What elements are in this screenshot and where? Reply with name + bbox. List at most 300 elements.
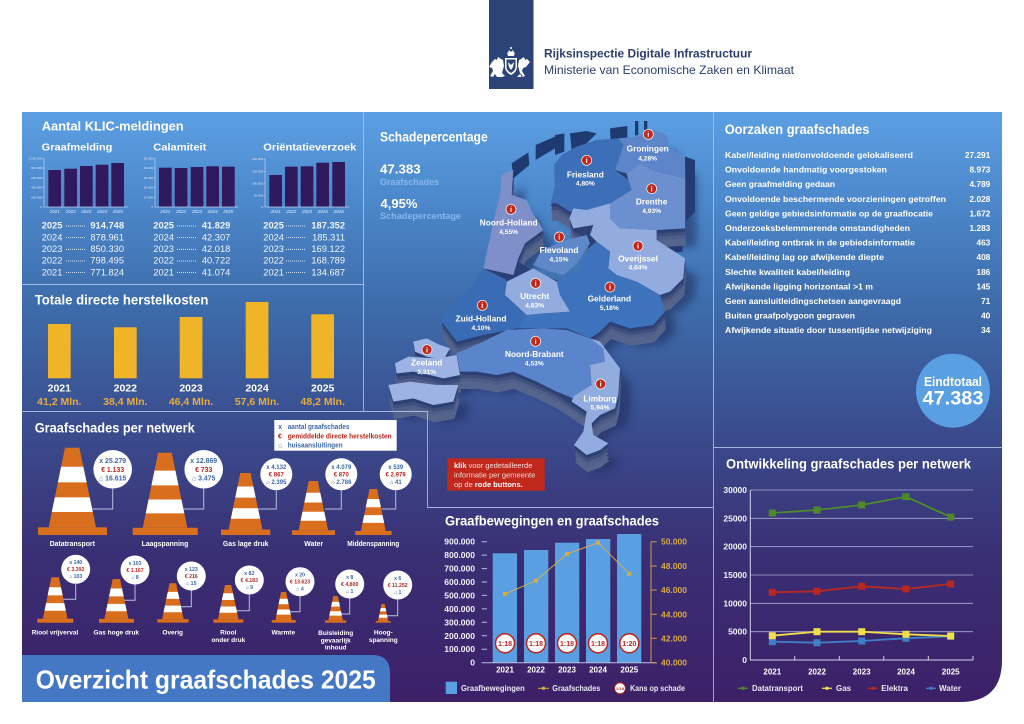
combo chart: 2021 [496, 666, 514, 675]
header organisation name: Ministerie van Economische Zaken en Klimaat [544, 63, 795, 77]
header organisation name [544, 46, 795, 77]
province labels: 3,31% [417, 369, 436, 376]
cone: Gas lage druk: x 4.132 [266, 465, 287, 471]
column: Calamiteit: 20.000 [144, 186, 153, 190]
header logo block [489, 0, 534, 89]
column: Graafmelding: 2024 [42, 232, 62, 242]
cone: Datatransport: Datatransport [50, 541, 96, 548]
column: Graafmelding: 2022 [65, 209, 76, 214]
province labels: Groningen [627, 143, 669, 153]
list of causes [725, 150, 991, 335]
cone: Riool onder druk: x 82 [244, 571, 254, 577]
province labels: Noord-Holland [480, 218, 538, 228]
combo chart: 1:18 [591, 641, 605, 648]
province labels [411, 143, 669, 412]
column: Graafmelding: 1.000.000 [29, 156, 42, 160]
bar chart: herstelkosten: 38,4 Mln. [103, 396, 148, 408]
bar chart: herstelkosten: 2021 [48, 383, 71, 395]
combo chart: 2024 [589, 666, 607, 675]
map of the Netherlands: i [426, 345, 428, 354]
province: Noord-Holland [483, 170, 543, 275]
cone: Water: € 870 [334, 472, 349, 478]
cone: Hoogspanning: Hoog- [374, 630, 393, 636]
list of causes: Geen geldige gebiedsinformatie op de graaflocatie [725, 208, 933, 218]
cone: Warmte [271, 567, 314, 636]
list of causes: 34 [981, 325, 991, 335]
list of causes: Kabel/leiding ontbrak in de gebiedsinformatie [725, 238, 915, 248]
line chart: 2023 [853, 668, 871, 676]
column: Graafmelding [29, 142, 128, 277]
province labels: 4,93% [642, 208, 661, 215]
map of the Netherlands: i [651, 184, 653, 193]
legend: cone values: gemiddelde directe herstelkosten [288, 434, 392, 440]
province: Utrecht [505, 268, 570, 315]
column: Calamiteit: 0 [151, 205, 153, 209]
province labels: Noord-Brabant [505, 349, 564, 359]
combo chart: 2022 [527, 666, 545, 675]
map of the Netherlands: i [586, 156, 588, 165]
column: Oriëntatieverzoek: 2024 [317, 209, 328, 214]
cone: Gas hoge druk: x 103 [129, 561, 142, 567]
legend: cone values: x [278, 424, 282, 431]
cone: Overig [157, 562, 206, 636]
province labels: Utrecht [520, 291, 549, 301]
column: Graafmelding: 2024 [96, 209, 108, 214]
cone: Gas hoge druk: € 1.167 [126, 568, 144, 574]
panel: Oorzaken graafschades [725, 121, 991, 428]
list of causes: Onvoldoende beschermende voorzieningen getroffen [725, 194, 946, 204]
column: Calamiteit: 2025 [222, 209, 234, 214]
list of causes: 4.789 [970, 179, 991, 189]
map of the Netherlands: i [510, 205, 512, 214]
province: Flevoland [533, 235, 590, 275]
heading: oorzaken: Oorzaken graafschades [725, 121, 870, 137]
column: Oriëntatieverzoek: 50.000 [254, 194, 263, 198]
province labels: 5,18% [600, 305, 619, 312]
column: Oriëntatieverzoek: 2024 [263, 232, 284, 242]
province: Friesland [551, 138, 632, 212]
list of causes: 1.283 [970, 223, 991, 233]
legend: networks: Gas [836, 684, 852, 693]
cone: Water: Water [304, 541, 323, 548]
column: Graafmelding: 2021 [49, 209, 60, 214]
cone: Buisleiding gevaarlijk inhoud: € 4.800 [341, 582, 358, 588]
list of causes: Buiten graafpolygoon gegraven [725, 311, 855, 321]
cone: Hoogspanning [369, 570, 412, 644]
cone: Riool onder druk: Riool [220, 630, 237, 636]
bar chart: herstelkosten: 2022 [114, 383, 137, 395]
total badge: 47.383 [922, 389, 984, 410]
cone: Overig: x 123 [185, 567, 198, 573]
callout: klik op rode buttons: op de rode buttons. [454, 480, 523, 489]
column: Graafmelding: 2023 [80, 209, 92, 214]
series: Elektra [769, 580, 954, 596]
cone: Middenspanning: € 2.979 [386, 472, 406, 478]
header organisation name: Rijksinspectie Digitale Infrastructuur [544, 46, 752, 60]
column: Oriëntatieverzoek: 2021 [270, 209, 281, 214]
list of causes: 408 [976, 252, 991, 262]
map of the Netherlands: i [535, 279, 537, 288]
province labels: 4,15% [550, 257, 569, 264]
legend: cone values: huisaansluitingen [288, 442, 343, 449]
panel: Graafschades per netwerk [32, 420, 412, 652]
column: Calamiteit: 2021 [159, 209, 171, 214]
cone: Overig: Overig [162, 630, 183, 636]
line chart: 2025 [942, 668, 960, 676]
column: Oriëntatieverzoek: 200.000 [252, 157, 263, 161]
stat: schadepercentage: Schadepercentage [380, 211, 461, 221]
stat: schadepercentage: 4,95% [380, 197, 418, 211]
province: Zeeland [388, 338, 460, 405]
column: Graafmelding: 2021 [42, 267, 62, 277]
cone: Warmte: x 20 [295, 572, 305, 578]
column: Graafmelding: 878.961 [90, 232, 124, 242]
province labels: 4,80% [576, 181, 595, 188]
cone: Overig: € 216 [185, 574, 198, 580]
province labels: 4,53% [525, 360, 544, 367]
combo chart: 900.000 [444, 537, 475, 547]
list of causes: 71 [981, 296, 991, 306]
cone: Gas lage druk: € 867 [269, 472, 284, 478]
line chart: 2022 [808, 668, 826, 676]
combo chart: 800.000 [444, 550, 475, 560]
line chart: 2021 [763, 668, 782, 676]
cone: Middenspanning [347, 458, 412, 548]
column: Calamiteit: 41.829 [202, 221, 230, 231]
legend: networks: Datatransport [752, 684, 803, 693]
bar chart: herstelkosten [37, 302, 345, 408]
icon: coat of arms [489, 47, 530, 77]
panel: Schadepercentage map [380, 121, 697, 491]
legend: cone values: € [278, 434, 282, 440]
heading: Schadepercentage: Schadepercentage [380, 130, 488, 145]
column: Calamiteit: 42.307 [202, 232, 230, 242]
cone: Hoogspanning: x 6 [394, 576, 401, 582]
legend: cone values: ⌂ [278, 442, 282, 449]
column: Oriëntatieverzoek [252, 142, 356, 277]
line chart: 2024 [897, 668, 915, 676]
map of the Netherlands: i [647, 130, 649, 139]
province labels: Drenthe [636, 197, 668, 207]
cone: Buisleiding gevaarlijk inhoud: Buisleiding [318, 630, 353, 637]
bar chart: herstelkosten: 57,6 Mln. [235, 396, 279, 408]
cone: Buisleiding gevaarlijk inhoud: inhoud [325, 645, 347, 652]
combo chart: 700.000 [444, 564, 475, 574]
cone: Datatransport: ⌂ 16.615 [99, 476, 126, 482]
cone: Buisleiding gevaarlijk inhoud: gevaarlijk [321, 637, 351, 644]
legend: graafbewegingen: Graafbewegingen [461, 684, 525, 693]
column: Calamiteit [144, 142, 238, 277]
legend: graafbewegingen [446, 682, 685, 694]
combo chart: 1:18 [560, 641, 574, 648]
list of causes: 463 [976, 238, 991, 248]
combo chart: 1:18 [498, 641, 512, 648]
line chart: 0 [742, 655, 747, 665]
map of the Netherlands: i [481, 301, 483, 310]
combo chart: 0 [470, 658, 475, 668]
combo chart: 44.000 [661, 609, 687, 619]
list of causes: Kabel/leiding niet/onvoldoende gelokaliseerd [725, 150, 913, 160]
province labels: Flevoland [540, 245, 578, 255]
cone: Buisleiding gevaarlijk inhoud: ⌂ 1 [346, 589, 354, 595]
cone: Laagspanning [133, 450, 223, 548]
list of causes: Onderzoeksbelemmerende omstandigheden [725, 223, 910, 233]
combo chart: 40.000 [661, 658, 687, 668]
column: Oriëntatieverzoek: 150.000 [252, 170, 263, 174]
column: Graafmelding: 850.330 [90, 244, 124, 254]
combo chart: 42.000 [661, 633, 687, 643]
combo chart: 50.000 [661, 537, 687, 547]
cone: Warmte: € 13.623 [290, 580, 310, 586]
bar chart: herstelkosten: 2024 [245, 383, 269, 395]
map of the Netherlands: i [600, 380, 602, 389]
legend: networks: Water [939, 684, 961, 693]
column: Oriëntatieverzoek: 2021 [263, 267, 284, 277]
combo chart: 46.000 [661, 585, 687, 595]
column: Calamiteit: 42.018 [202, 244, 230, 254]
combo chart: 500.000 [444, 590, 475, 600]
series: Gas [769, 628, 954, 640]
column: Graafmelding: 2025 [112, 209, 123, 214]
column: Oriëntatieverzoek: 2023 [263, 244, 284, 254]
column: Calamiteit: 50.000 [144, 156, 153, 160]
cone: Riool vrijverval: Riool vrijverval [32, 630, 78, 636]
column: Calamiteit: 2023 [191, 209, 203, 214]
cone: Overig: ⌂ 15 [186, 581, 197, 587]
legend: graafbewegingen: Graafschades [552, 684, 601, 693]
combo chart: 300.000 [444, 617, 475, 627]
panel: Graafbewegingen en graafschades [444, 513, 687, 694]
column: Graafmelding: 400.000 [31, 186, 42, 190]
province labels: 4,55% [499, 229, 518, 236]
cone: Riool onder druk: onder druk [211, 637, 246, 644]
province labels: Gelderland [588, 294, 631, 304]
cone: Riool vrijverval [32, 555, 90, 636]
cone: Hoogspanning: € 11.252 [388, 583, 408, 589]
combo chart: 1:20 [622, 641, 636, 648]
combo chart: 48.000 [661, 561, 687, 571]
column: Oriëntatieverzoek: 2022 [285, 209, 297, 214]
column: Oriëntatieverzoek: 169.122 [311, 244, 345, 254]
list of causes: 1.672 [970, 208, 991, 218]
column: Graafmelding: 800.000 [31, 166, 42, 170]
column: Oriëntatieverzoek: 2025 [333, 209, 344, 214]
list of causes: 2.028 [970, 194, 991, 204]
cone: Datatransport: € 1.133 [101, 467, 124, 474]
province labels: 4,10% [472, 325, 491, 332]
column: Oriëntatieverzoek: 185.311 [312, 232, 345, 242]
line chart: 20000 [723, 542, 747, 552]
cone: Datatransport: x 25.279 [99, 458, 126, 465]
list of causes: Slechte kwaliteit kabel/leiding [725, 267, 850, 277]
legend: networks: Elektra [881, 684, 909, 693]
column: Oriëntatieverzoek: 2023 [301, 209, 313, 214]
cone: Laagspanning: x 12.869 [190, 458, 217, 465]
list of causes: Geen graafmelding gedaan [725, 179, 835, 189]
cone: Riool vrijverval: x 140 [69, 560, 82, 566]
series: Water [769, 633, 954, 646]
bar chart: herstelkosten: 41,2 Mln. [37, 396, 82, 408]
province labels: Limburg [583, 393, 617, 403]
list of causes: 8.973 [970, 165, 991, 175]
column: Calamiteit: 2024 [153, 232, 174, 242]
total badge: Eindtotaal [924, 375, 982, 389]
title banner: Overzicht graafschades 2025 [36, 664, 376, 694]
info buttons [422, 129, 657, 389]
combo chart: 100.000 [444, 644, 475, 654]
cone: Laagspanning: Laagspanning [142, 541, 188, 548]
legend: cone values [274, 420, 397, 451]
line chart: 30000 [723, 485, 747, 495]
combo chart: 600.000 [444, 577, 475, 587]
cone: Hoogspanning: ⌂ 1 [394, 590, 402, 596]
stat: schadepercentage [380, 197, 461, 221]
cone: Gas hoge druk: ⌂ 8 [131, 575, 139, 581]
callout: klik op rode buttons: klik voor gedetailleerde [454, 461, 532, 470]
map of the Netherlands: i [609, 283, 611, 292]
legend: graafbewegingen: Kans op schade [630, 684, 685, 693]
list of causes: 27.291 [965, 150, 991, 160]
line chart: 10000 [723, 598, 747, 608]
combo chart [444, 534, 687, 675]
cone: Water: x 4.079 [331, 465, 352, 471]
cone: Buisleiding gevaarlijk inhoud [318, 570, 364, 652]
list of causes: 40 [981, 311, 991, 321]
combo chart: 400.000 [444, 604, 475, 614]
column: Calamiteit: 41.074 [202, 267, 230, 277]
cone: Middenspanning: ⌂ 41 [390, 480, 402, 486]
map of the Netherlands [388, 121, 697, 473]
cone: Middenspanning: Middenspanning [347, 541, 399, 548]
heading: per netwerk: Graafschades per netwerk [35, 420, 195, 436]
bar chart: herstelkosten: 48,2 Mln. [301, 396, 345, 408]
column: Calamiteit: 40.722 [202, 256, 230, 266]
column: Oriëntatieverzoek: 0 [261, 205, 263, 209]
stat: graafschades [380, 162, 439, 187]
column: Oriëntatieverzoek: 134.687 [311, 267, 345, 277]
map of the Netherlands: i [637, 242, 639, 251]
combo chart: 2023 [558, 666, 576, 675]
column: Oriëntatieverzoek: 187.352 [311, 221, 345, 231]
column: Calamiteit: Calamiteit [153, 142, 207, 154]
bar chart: herstelkosten: 2023 [179, 383, 203, 395]
province labels: Zuid-Holland [456, 314, 506, 324]
column: Graafmelding: 2023 [42, 244, 62, 254]
cone: Warmte: Warmte [271, 630, 295, 636]
bar chart: herstelkosten: 46,4 Mln. [169, 396, 213, 408]
line chart: 5000 [728, 627, 747, 637]
cone: Riool vrijverval: ⌂ 103 [69, 574, 82, 580]
province: Limburg [572, 338, 620, 455]
legend: graafbewegingen: 1:18 [616, 686, 625, 691]
map of the Netherlands: i [535, 337, 537, 346]
column: Graafmelding: Graafmelding [42, 142, 112, 154]
panel: Aantal KLIC-meldingen [29, 119, 356, 277]
column: Calamiteit: 2022 [175, 209, 187, 214]
combo chart: 1:18 [529, 641, 543, 648]
column: Oriëntatieverzoek: 168.789 [311, 256, 345, 266]
cone: Gas lage druk: Gas lage druk [223, 541, 269, 548]
column: Calamiteit: 2022 [153, 256, 174, 266]
column: Calamiteit: 2021 [153, 267, 174, 277]
list of causes: Kabel/leiding lag op afwijkende diepte [725, 252, 884, 262]
province labels: 4,64% [629, 264, 648, 271]
province: Groningen [615, 130, 685, 178]
cone: Riool onder druk: ⌂ 9 [246, 585, 253, 591]
column: Graafmelding: 200.000 [31, 196, 42, 200]
column: Graafmelding: 914.748 [90, 221, 124, 231]
cone: Gas lage druk: ⌂ 2.395 [266, 480, 287, 486]
heading: graafbewegingen: Graafbewegingen en graafschades [445, 513, 659, 529]
stat: graafschades: Graafschades [380, 177, 439, 187]
callout: klik op rode buttons [447, 458, 545, 491]
column: Calamiteit: 2023 [153, 244, 174, 254]
column: Oriëntatieverzoek: 2022 [263, 256, 284, 266]
panel: Ontwikkeling graafschades per netwerk [723, 455, 973, 693]
column: Calamiteit: 40.000 [144, 166, 153, 170]
line chart: 25000 [723, 513, 747, 523]
column: Graafmelding: 600.000 [31, 176, 42, 180]
total badge [916, 354, 990, 428]
list of causes: Geen aansluitleidingschetsen aangevraagd [725, 296, 901, 306]
panel: Totale directe herstelkosten [35, 292, 345, 408]
list of causes: Afwijkende situatie door tussentijdse netwijziging [725, 325, 932, 335]
combo chart: 200.000 [444, 631, 475, 641]
column: Oriëntatieverzoek: 2025 [263, 221, 284, 231]
cone: Riool vrijverval: € 3.393 [67, 567, 84, 573]
column: Graafmelding: 2025 [42, 221, 62, 231]
province labels: Zeeland [411, 358, 442, 368]
province: Drenthe [610, 163, 685, 230]
cone: Datatransport [38, 448, 132, 548]
province: Noord-Brabant [457, 328, 605, 398]
cone: Riool onder druk: € 4.183 [241, 578, 258, 584]
combo chart: 2025 [620, 666, 639, 675]
column: Graafmelding: 0 [40, 205, 42, 209]
province labels: 4,28% [638, 155, 657, 162]
line chart [723, 485, 973, 676]
cone: Riool onder druk [211, 566, 264, 644]
cone: Hoogspanning: spanning [369, 637, 398, 644]
province labels: 5,94% [591, 405, 610, 412]
cone: Buisleiding gevaarlijk inhoud: x 8 [346, 575, 353, 581]
list of causes: Onvoldoende handmatig voorgestoken [725, 165, 887, 175]
list of causes: 145 [976, 281, 991, 291]
province labels: 4,83% [525, 302, 544, 309]
map of the Netherlands: i [558, 233, 560, 242]
list of causes: Afwijkende ligging horizontaal >1 m [725, 281, 873, 291]
column: Calamiteit: 2025 [153, 221, 174, 231]
legend: networks [738, 684, 961, 693]
province labels: Overijssel [618, 253, 658, 263]
heading: herstelkosten: Totale directe herstelkosten [35, 292, 208, 307]
title banner [22, 655, 390, 702]
cone: Gas hoge druk: Gas hoge druk [94, 630, 139, 636]
cone: Laagspanning: ⌂ 3.475 [192, 476, 216, 482]
cone: Water [292, 458, 357, 548]
column: Calamiteit: 30.000 [144, 176, 153, 180]
column: Graafmelding: 771.824 [90, 267, 124, 277]
cone: Gas hoge druk [94, 556, 150, 636]
province labels: Friesland [567, 169, 604, 179]
province: Zuid-Holland [442, 268, 527, 342]
column: Calamiteit: 10.000 [144, 196, 153, 200]
heading: ontwikkeling: Ontwikkeling graafschades per netwerk [726, 455, 971, 471]
line chart: 15000 [723, 570, 747, 580]
bar chart: herstelkosten: 2025 [311, 383, 335, 395]
column: Graafmelding: 2022 [42, 256, 62, 266]
cone: Middenspanning: x 539 [388, 465, 404, 471]
